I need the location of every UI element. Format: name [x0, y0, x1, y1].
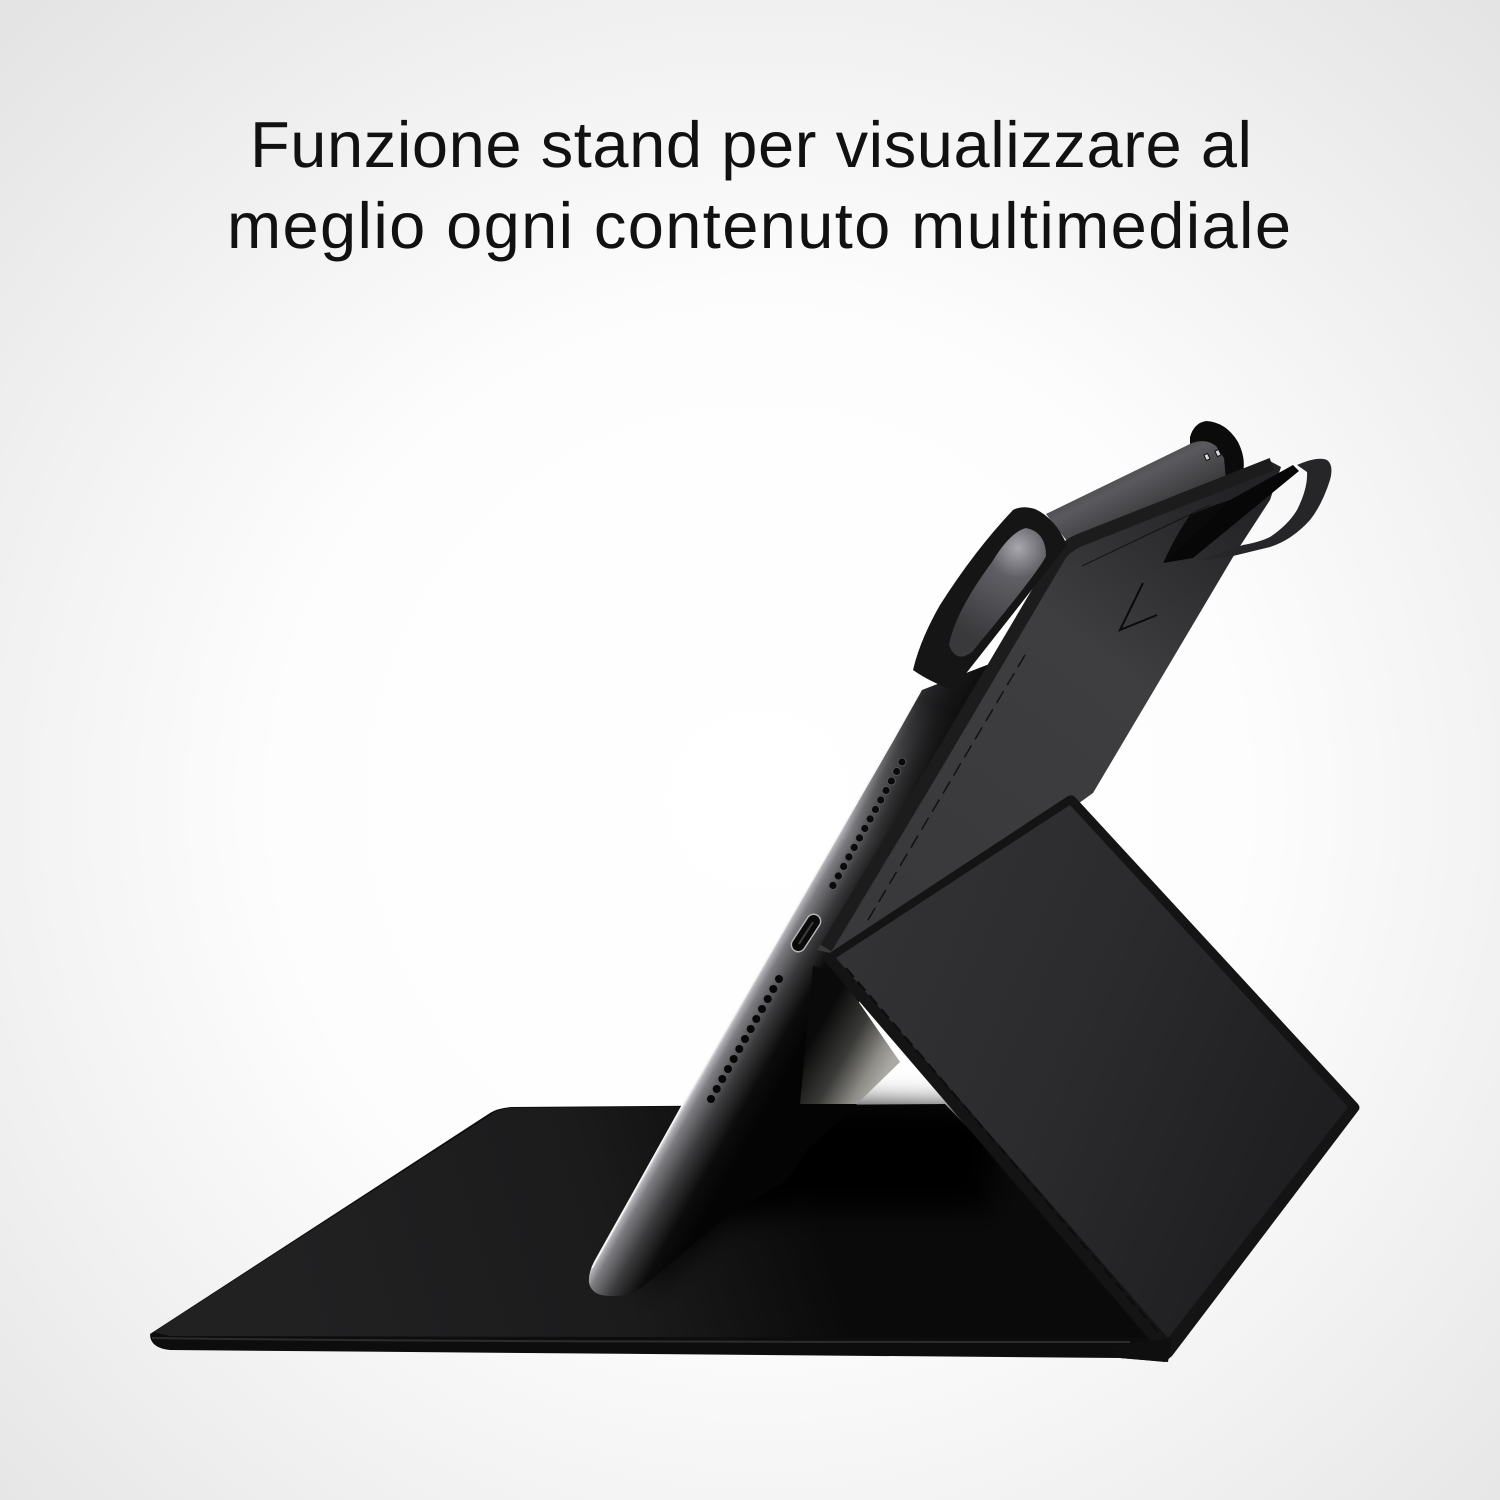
title: [227, 108, 1291, 262]
pencil holder clip: [913, 507, 1067, 690]
tablet top edge / pencil: [1046, 441, 1226, 545]
base mat of the case: [150, 1104, 1170, 1362]
speaker holes upper: [829, 758, 906, 890]
speaker holes lower: [707, 975, 783, 1103]
black strip: [1163, 465, 1299, 563]
panel stitching: [846, 968, 1158, 1332]
loop band: [1200, 459, 1331, 560]
strap shadow on flap: [1163, 500, 1230, 563]
USB-C port: [789, 912, 823, 954]
tablet body: [589, 660, 1010, 1296]
pencil markings: [1204, 449, 1221, 461]
cast shadow under tablet: [640, 1105, 1000, 1296]
title: Funzione stand per visualizzare al: [250, 108, 1252, 181]
upper flap of the case: [817, 460, 1281, 960]
pencil top ring: [1190, 421, 1244, 478]
stitching: [868, 650, 1028, 920]
title: meglio ogni contenuto multimediale: [227, 189, 1291, 262]
felt edge: [826, 464, 1272, 948]
hinge spine: [1110, 1338, 1172, 1362]
product photo: tablet case in stand mode: [150, 421, 1360, 1362]
elastic strap loop: [1163, 459, 1331, 563]
tablet top darkening: [800, 660, 1010, 960]
front stand panel: [822, 795, 1360, 1362]
pencil lens: [949, 528, 1046, 657]
strap tab: [1120, 583, 1157, 630]
kickstand: [800, 966, 900, 1104]
